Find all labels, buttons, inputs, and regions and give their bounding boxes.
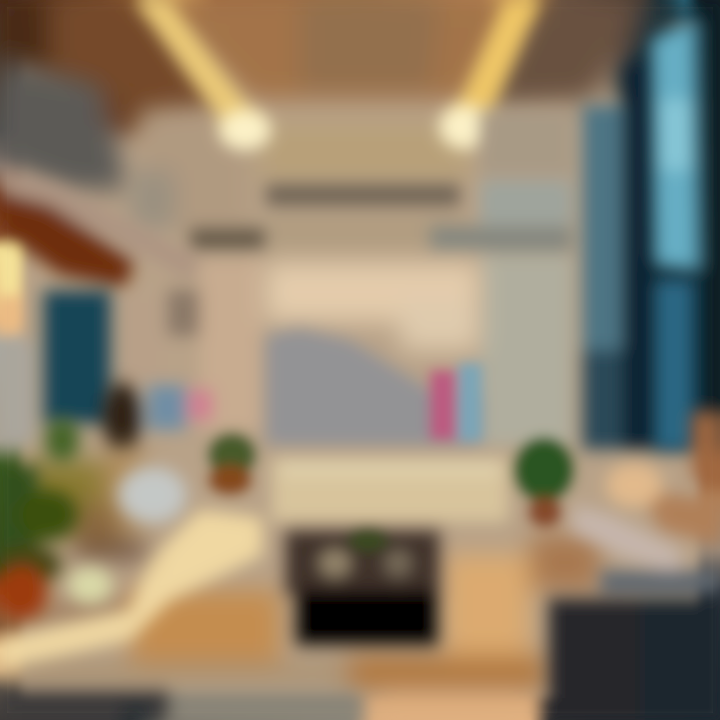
centre wall art: pink and blue bars xyxy=(430,363,482,441)
plant on coffee table xyxy=(348,528,388,552)
coffee table xyxy=(285,530,440,645)
right sofa xyxy=(570,463,720,594)
left shelf objects xyxy=(102,382,212,454)
upper centre wall xyxy=(130,110,470,255)
grey sofa bottom left xyxy=(0,690,360,720)
centre wall art: warm backdrop xyxy=(265,262,480,350)
left blue panel xyxy=(43,290,111,424)
left sideboard xyxy=(25,450,145,558)
windows: dark frame and teal glazing xyxy=(582,0,720,450)
central sofa xyxy=(272,458,508,522)
grey upper left wall xyxy=(0,60,150,190)
dark centre band xyxy=(190,184,460,250)
plant: small left wall xyxy=(44,418,80,462)
floor xyxy=(0,535,600,720)
ceiling light strips xyxy=(135,0,540,135)
bright floor reflection xyxy=(0,510,262,668)
plant pot: terracotta xyxy=(0,564,48,620)
wood beam left xyxy=(0,165,205,288)
ceiling: wood panels xyxy=(0,0,680,130)
plant: large bottom left xyxy=(0,465,78,585)
left wall below window xyxy=(0,260,262,445)
ceiling light glows xyxy=(219,105,491,150)
windows: light sky pane xyxy=(652,0,720,450)
right wall panel xyxy=(430,110,572,445)
left sideboard pale cushion xyxy=(68,467,186,603)
left yellow window xyxy=(0,245,20,335)
dark sofa bottom right xyxy=(548,598,720,720)
plant: right centre xyxy=(514,438,574,527)
plant: left centre xyxy=(208,433,256,495)
orange cushion right edge xyxy=(692,412,720,480)
centre wall art: grey slope xyxy=(266,328,480,445)
